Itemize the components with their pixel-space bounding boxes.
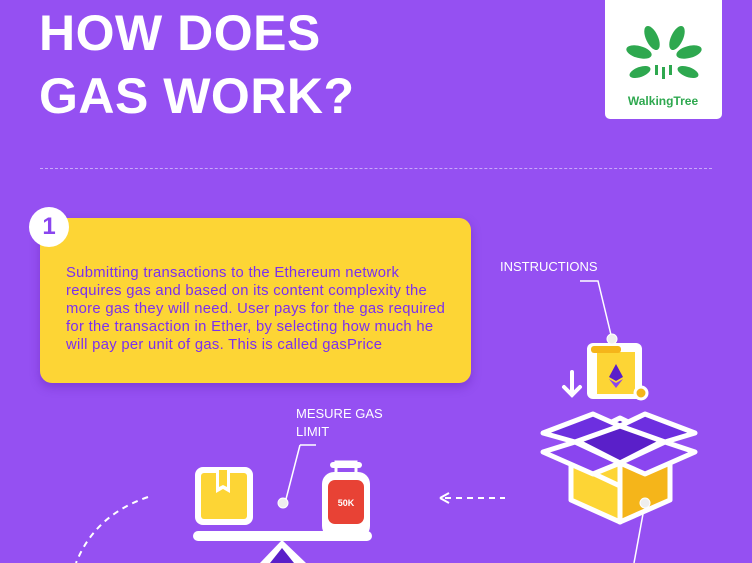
logo: WalkingTree: WalkingTree <box>628 94 698 108</box>
badge: number 1 <box>29 207 69 247</box>
title: HOW DOES <box>39 5 321 61</box>
text block: more gas they will need. User pays for the gas required <box>66 301 445 317</box>
title <box>39 5 355 124</box>
text block: requires gas and based on its content complexity the <box>66 283 427 299</box>
arrow: dashed curve <box>76 497 148 563</box>
panel: step 1 <box>40 218 471 383</box>
arrow: down <box>564 372 580 395</box>
text block: for the transaction in Ether, by selecting how much he <box>66 319 433 335</box>
divider <box>40 168 712 169</box>
arrow: dashed left <box>440 493 505 503</box>
label: mesure gas limit: LIMIT <box>296 424 329 439</box>
logo: WalkingTree <box>605 0 722 119</box>
icon: open box <box>543 414 695 522</box>
icon: scale: 50K <box>338 498 355 508</box>
icon: scroll <box>587 334 647 399</box>
text block <box>66 265 445 353</box>
label: mesure gas limit: MESURE GAS <box>296 406 383 421</box>
icon: scale <box>193 462 372 563</box>
label: instructions: INSTRUCTIONS <box>500 259 598 274</box>
label: mesure gas limit <box>296 406 383 439</box>
title: GAS WORK? <box>39 68 355 124</box>
badge: number 1: 1 <box>42 213 56 240</box>
text block: will pay per unit of gas. This is called gasPrice <box>66 337 382 353</box>
text block: Submitting transactions to the Ethereum network <box>66 265 399 281</box>
